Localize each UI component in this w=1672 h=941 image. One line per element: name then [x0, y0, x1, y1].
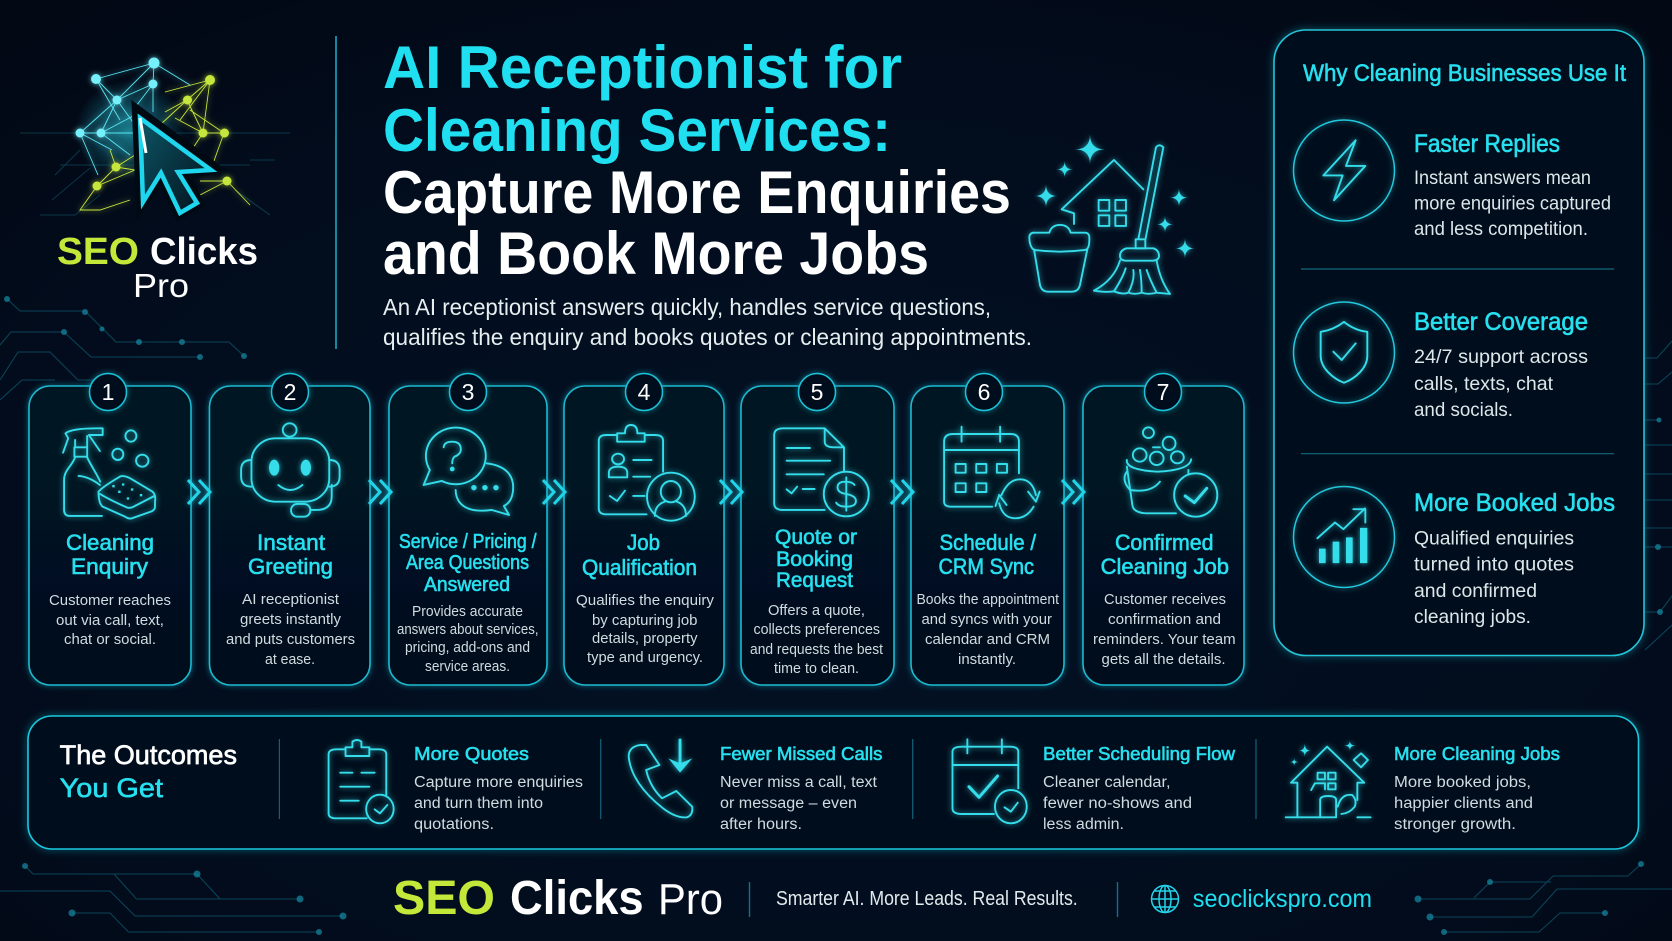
panel: process cards [29, 374, 1244, 685]
step numbers: 4 [638, 379, 651, 405]
step numbers: 2 [284, 379, 296, 405]
step 2 text: Greeting [248, 554, 333, 579]
icon: calendar with sync [944, 427, 1040, 518]
step 1 text: Customer reaches [49, 592, 171, 609]
card 2 frame [210, 386, 370, 685]
step 7 text [1093, 530, 1236, 668]
outcome: better scheduling flow: Better Scheduling Flow [1043, 743, 1236, 764]
decorative circuit traces [0, 296, 1672, 935]
step numbers: 3 [462, 379, 474, 405]
benefit: better coverage: Better Coverage [1414, 308, 1588, 336]
outcomes heading: You Get [60, 773, 164, 803]
step 6 text: and syncs with your [922, 611, 1052, 628]
step 5 text: Quote or [775, 526, 857, 549]
step 3 text: answers about services, [397, 621, 538, 638]
outcome: more cleaning jobs: More Cleaning Jobs [1394, 743, 1560, 764]
outcome: fewer missed calls: Fewer Missed Calls [720, 743, 882, 764]
step 2 text: Instant [257, 530, 325, 555]
step 3 text: Provides accurate [412, 603, 523, 620]
footer brand: Pro [658, 875, 723, 924]
outcome: more quotes: More Quotes [414, 743, 529, 764]
outcome: more cleaning jobs: happier clients and [1394, 795, 1533, 812]
outcomes heading: The Outcomes [60, 740, 237, 770]
step numbers: 7 [1157, 379, 1169, 405]
step 5 text: Offers a quote, [768, 602, 865, 619]
outcome: better scheduling flow: Cleaner calendar, [1043, 774, 1170, 791]
step 5 text: collects preferences [754, 621, 880, 638]
step 1 text: out via call, text, [56, 612, 164, 629]
outcome: more cleaning jobs [1286, 741, 1560, 833]
step 4 text [576, 530, 714, 666]
step 3 text: Area Questions [406, 552, 529, 574]
footer website: seoclickspro.com [1193, 885, 1372, 913]
card 6 frame [911, 386, 1064, 685]
logo wordmark: SEO [57, 231, 139, 273]
footer brand [393, 872, 723, 925]
outcome: fewer missed calls: Never miss a call, text [720, 774, 878, 791]
panel: why cleaning businesses use it [1274, 30, 1644, 656]
step 3 text: Answered [424, 574, 510, 596]
icon: bucket with check [1125, 427, 1217, 517]
step numbers [90, 374, 1182, 410]
step 1 text: Cleaning [66, 530, 154, 555]
benefit: more booked jobs [1294, 486, 1615, 628]
step 7 text: Confirmed [1115, 530, 1214, 555]
step 5 text: Request [776, 569, 853, 592]
card 4 frame [564, 386, 724, 685]
benefit: faster replies: Instant answers mean [1414, 167, 1591, 189]
outcome: fewer missed calls: after hours. [720, 816, 802, 833]
step 2 text [226, 530, 355, 668]
outcome: better scheduling flow: less admin. [1043, 816, 1124, 833]
logo wordmark: Clicks [150, 231, 258, 273]
outcome: better scheduling flow [952, 739, 1236, 833]
outcome: fewer missed calls [629, 740, 882, 833]
icon: network cursor [20, 58, 290, 220]
step 5 text: time to clean. [774, 660, 859, 677]
step 7 text: Customer receives [1104, 591, 1226, 608]
step 7 text: gets all the details. [1102, 651, 1226, 668]
benefit: more booked jobs: More Booked Jobs [1414, 489, 1615, 517]
benefit: better coverage [1294, 302, 1588, 421]
benefit: faster replies: more enquiries captured [1414, 192, 1611, 214]
benefit: more booked jobs: turned into quotes [1414, 554, 1574, 576]
step 7 text: reminders. Your team [1093, 631, 1236, 648]
step 2 text: greets instantly [240, 611, 341, 628]
step 7 text: Cleaning Job [1101, 554, 1229, 579]
step 6 text: instantly. [958, 651, 1016, 668]
step 4 text: Job [627, 530, 660, 555]
step 2 text: AI receptionist [242, 591, 340, 608]
icon: globe [1152, 886, 1178, 912]
step 5 text: and requests the best [750, 641, 884, 658]
step 6 text: Schedule / [940, 530, 1037, 555]
step 5 text [750, 526, 884, 677]
outcome: more quotes: and turn them into [414, 795, 543, 812]
panel: outcomes [28, 716, 1638, 849]
footer brand: SEO [393, 872, 495, 925]
step 4 text: by capturing job [592, 612, 698, 629]
subtitle: qualifies the enquiry and books quotes or cleaning appointments. [383, 324, 1032, 350]
outcome: better scheduling flow: fewer no-shows and [1043, 795, 1192, 812]
icon: question chat bubbles [424, 428, 513, 515]
subtitle [383, 294, 1032, 350]
step 5 text: Booking [776, 548, 853, 571]
title [383, 34, 1011, 287]
step numbers: 1 [102, 379, 114, 405]
outcome: more cleaning jobs: More booked jobs, [1394, 774, 1531, 791]
subtitle: An AI receptionist answers quickly, handles service questions, [383, 294, 991, 320]
benefit: better coverage: calls, texts, chat [1414, 373, 1554, 395]
step 6 text [916, 530, 1060, 668]
step numbers: 5 [811, 379, 823, 405]
step 3 text [397, 531, 538, 675]
step numbers: 6 [978, 379, 990, 405]
outcomes heading [60, 740, 237, 803]
step 7 text: confirmation and [1108, 611, 1221, 628]
outcome: more quotes: quotations. [414, 816, 494, 833]
outcome: more quotes [329, 740, 583, 833]
benefit: more booked jobs: Qualified enquiries [1414, 528, 1574, 550]
card 7 frame [1083, 386, 1244, 685]
footer brand: Clicks [510, 872, 644, 925]
logo block [20, 58, 290, 273]
icon: clipboard with person [599, 425, 695, 521]
benefit: better coverage: 24/7 support across [1414, 346, 1588, 368]
title: Capture More Enquiries [383, 159, 1011, 226]
panel heading: Why Cleaning Businesses Use It [1303, 60, 1626, 87]
benefit: faster replies: Faster Replies [1414, 130, 1560, 158]
step 2 text: and puts customers [226, 631, 355, 648]
card 5 frame [741, 386, 894, 685]
logo word: Pro: Pro [133, 267, 189, 304]
title: AI Receptionist for [383, 34, 902, 101]
header divider [335, 36, 337, 349]
step 4 text: Qualifies the enquiry [576, 592, 714, 609]
benefit: faster replies [1294, 120, 1611, 240]
benefit: faster replies: and less competition. [1414, 218, 1588, 240]
title: and Book More Jobs [383, 220, 929, 287]
step 1 text: Enquiry [71, 554, 148, 579]
outcome: more quotes: Capture more enquiries [414, 774, 583, 791]
outcome: more cleaning jobs: stronger growth. [1394, 816, 1516, 833]
icon: quote document with dollar [774, 428, 869, 516]
benefit: more booked jobs: cleaning jobs. [1414, 606, 1531, 628]
step 1 text: chat or social. [64, 631, 156, 648]
step 4 text: Qualification [582, 555, 697, 580]
icon: robot receptionist [241, 423, 340, 517]
benefit: better coverage: and socials. [1414, 399, 1513, 421]
icon: house bucket broom [1029, 134, 1195, 294]
step 6 text: CRM Sync [938, 554, 1034, 579]
step 6 text: Books the appointment [916, 591, 1060, 608]
step 4 text: type and urgency. [587, 649, 703, 666]
step 1 text [49, 530, 171, 648]
step 6 text: calendar and CRM [925, 631, 1050, 648]
step 3 text: pricing, add-ons and [405, 639, 530, 656]
step 4 text: details, property [592, 630, 698, 647]
icon: spray bottle and sponge [63, 428, 155, 519]
card 3 frame [389, 386, 547, 685]
arrows between cards [188, 480, 1084, 504]
outcome: fewer missed calls: or message – even [720, 795, 857, 812]
step 2 text: at ease. [265, 651, 315, 668]
card 1 frame [29, 386, 191, 685]
footer tagline: Smarter AI. More Leads. Real Results. [776, 888, 1078, 910]
step 3 text: Service / Pricing / [399, 531, 537, 553]
step 3 text: service areas. [425, 658, 510, 675]
benefit: more booked jobs: and confirmed [1414, 580, 1537, 602]
title: Cleaning Services: [383, 97, 891, 164]
